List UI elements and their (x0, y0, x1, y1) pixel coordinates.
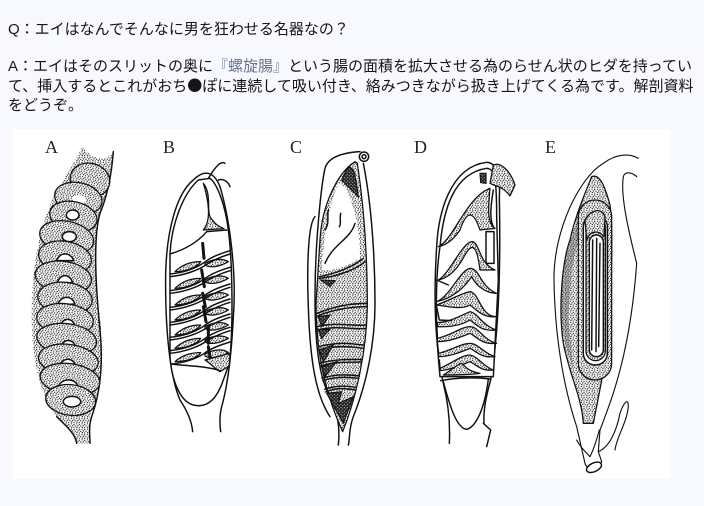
lower duct and vent (577, 430, 599, 457)
transverse folds (170, 251, 230, 372)
outer wall (435, 162, 500, 447)
upper white chamber (322, 183, 360, 270)
inner chamber (170, 178, 232, 406)
fold dividers (317, 258, 367, 392)
figure C: scroll valve section (290, 137, 375, 445)
question text: Q：エイはなんでそんなに男を狂わせる名器なの？ (8, 21, 349, 38)
stippled tag and duct (490, 164, 515, 196)
answer text (8, 58, 694, 114)
chevron folds (437, 188, 497, 375)
bottom chamber line (172, 364, 220, 371)
anatomy illustration panel (13, 129, 671, 479)
concentric layers (578, 200, 612, 380)
trailing loop (598, 402, 628, 452)
label A: A (45, 137, 58, 157)
inner capsule (316, 162, 367, 432)
figure D: conical folds section (414, 137, 515, 447)
dark tissue patches (342, 167, 358, 197)
label E: E (545, 137, 556, 157)
answer text: て、挿入するとこれがおち●ぽに連続して吸い付き、絡みつきながら扱き上げてくる為です。解剖資料 (8, 75, 694, 96)
answer text: A：エイはそのスリットの奥に『螺旋腸』という腸の面積を拡大させる為のらせん状のヒダを持ってい (8, 58, 692, 75)
terminal bulb (441, 378, 491, 429)
inner chamber (436, 168, 498, 377)
upper stippled duct (203, 183, 224, 230)
figure B: longitudinal section with transverse folds (163, 137, 234, 432)
stippled valve body (561, 176, 612, 423)
figure A: external spiral valve (32, 137, 114, 443)
figure E: ring valve section (545, 137, 638, 475)
body outline (32, 147, 113, 443)
pipe opening (359, 152, 369, 161)
outer wall (554, 155, 638, 468)
label D: D (414, 137, 427, 157)
outer wall (308, 152, 375, 445)
answer text: をどうぞ。 (8, 97, 83, 114)
label B: B (163, 137, 175, 157)
outer wall (166, 173, 234, 432)
central column (202, 243, 210, 357)
label C: C (290, 137, 302, 157)
folds' left walls (436, 280, 452, 368)
spiral rings (33, 159, 114, 418)
